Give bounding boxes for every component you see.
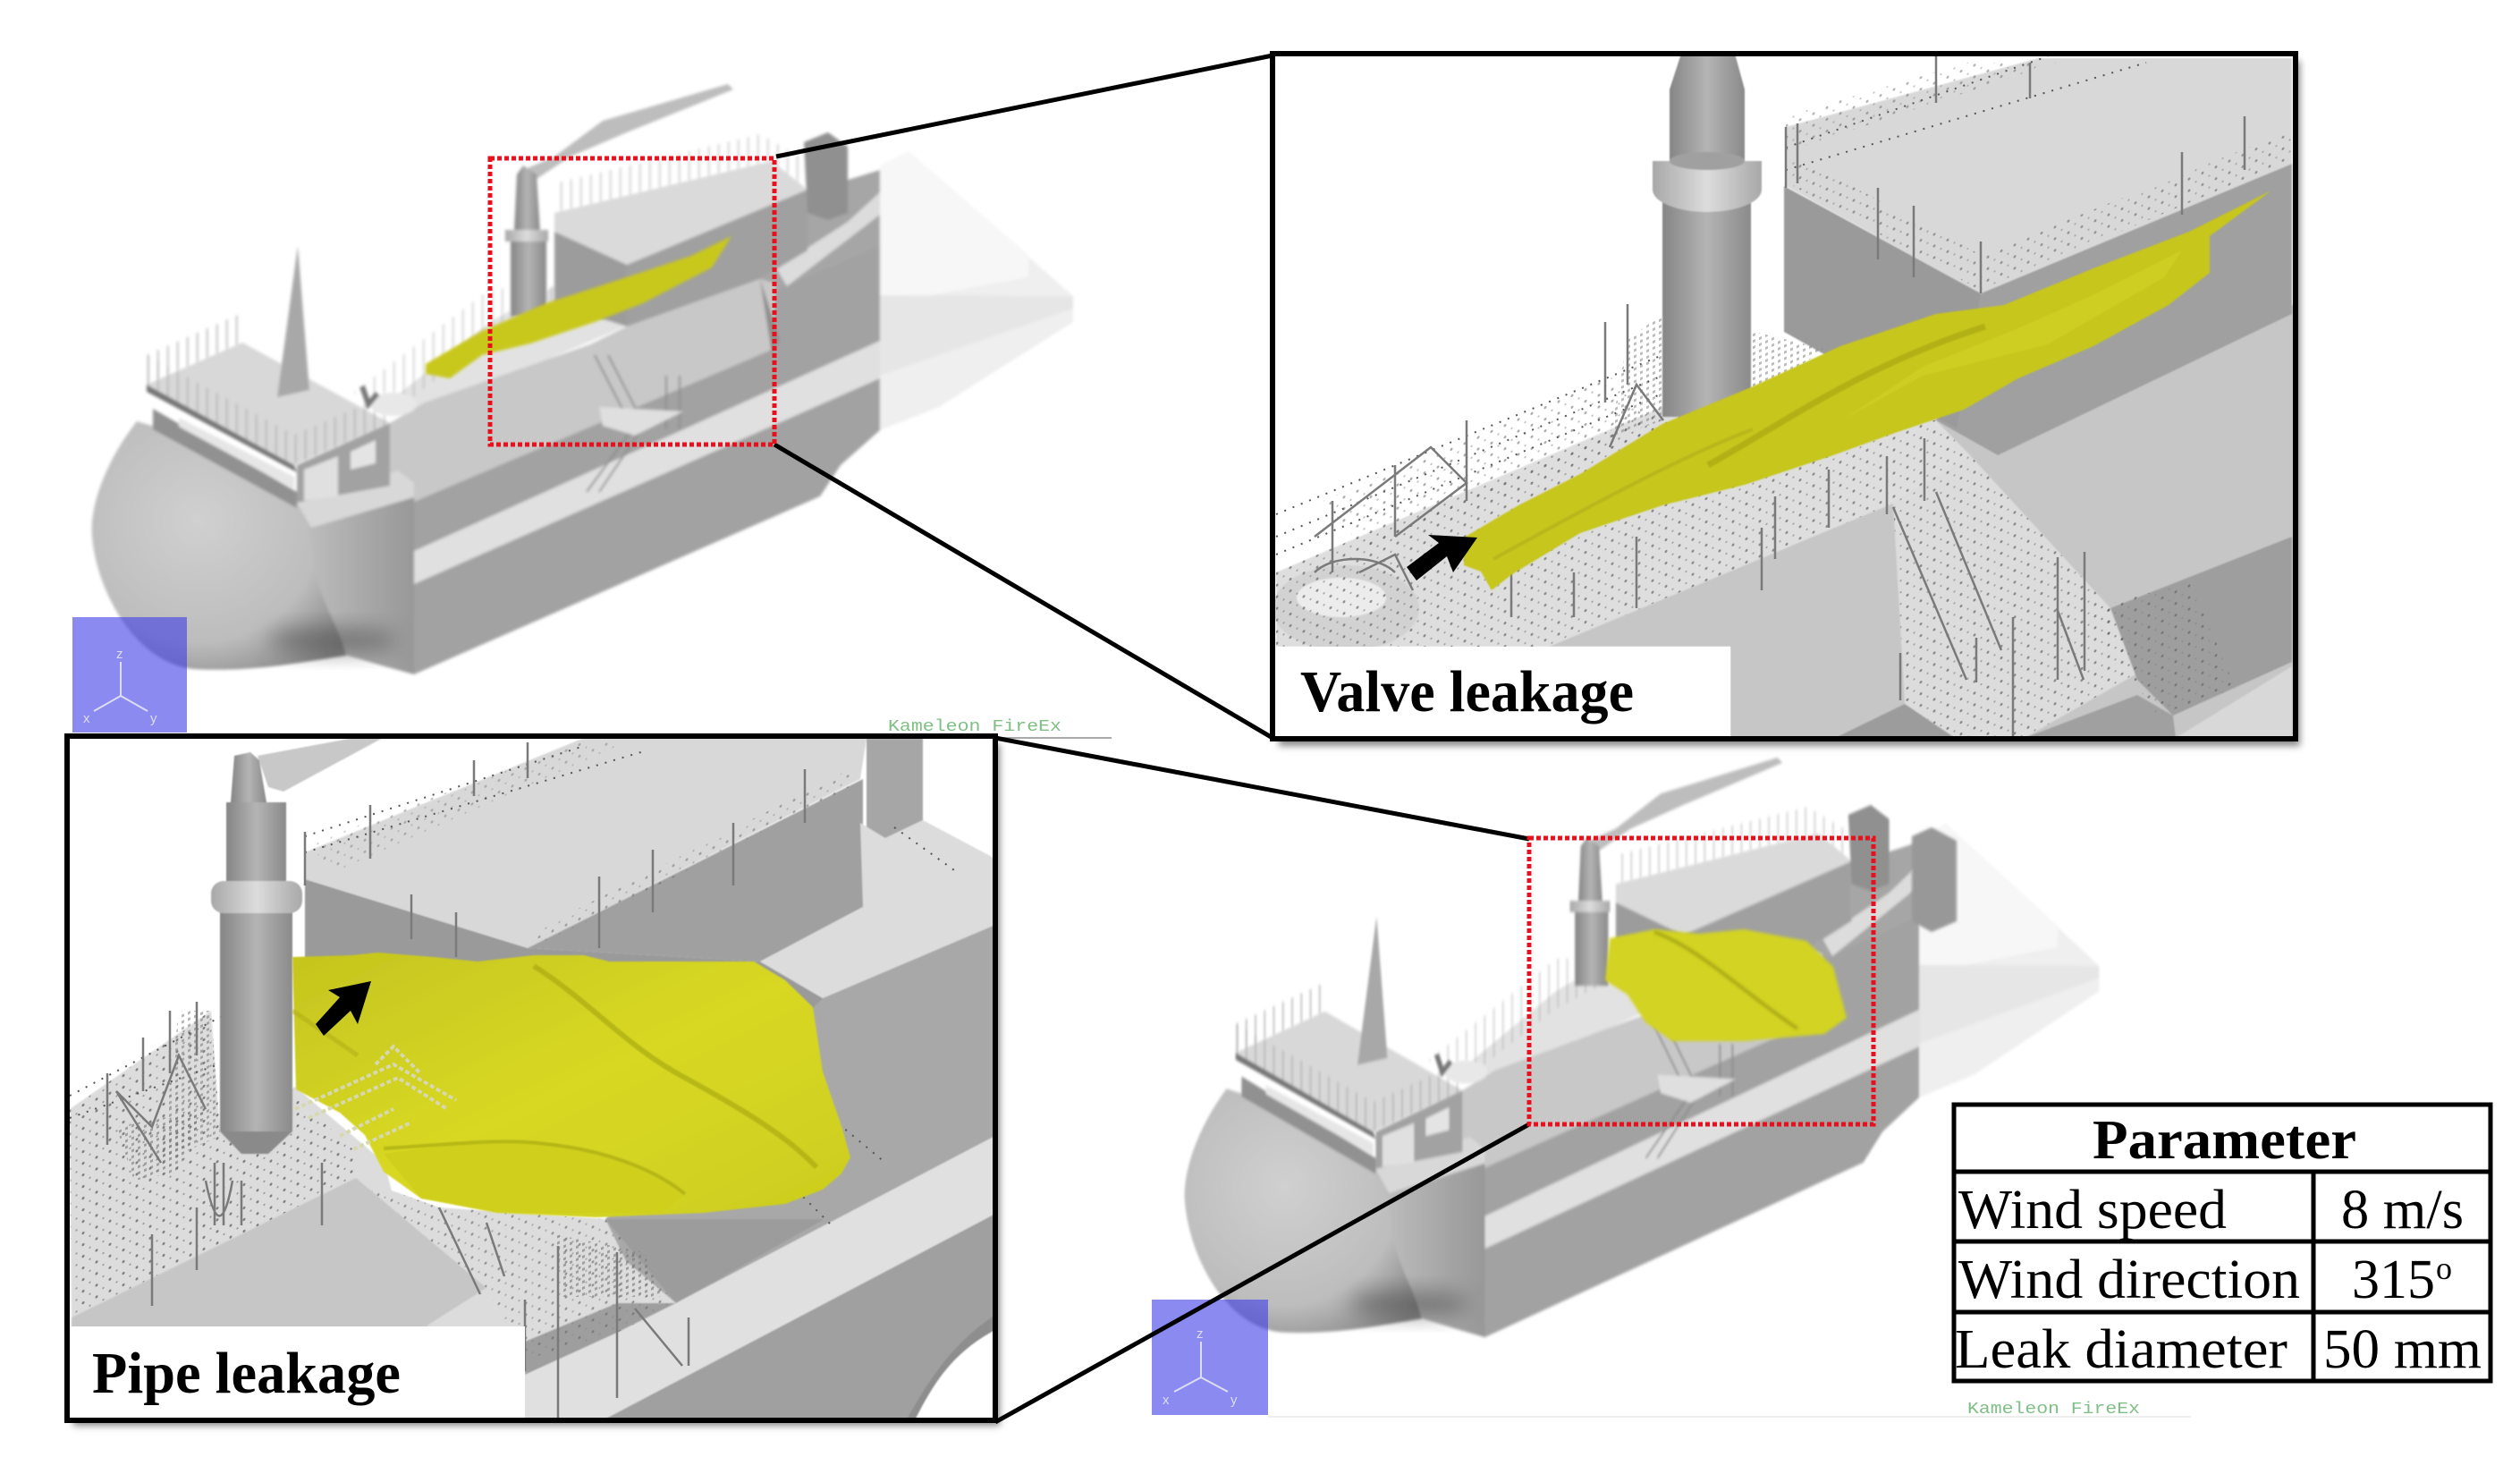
row: leak diameter [1955, 1319, 2482, 1380]
axis indicator: overview ship bottom: z [1197, 1326, 1204, 1342]
gas plume on overview ship (pipe leak) [1605, 929, 1847, 1041]
gas plume: valve leakage [1464, 191, 2271, 590]
ship model: valve leakage overview [92, 84, 1073, 674]
arrow: pipe leak point [316, 981, 371, 1036]
dotted railings: valve panel [1276, 54, 2292, 738]
axis indicator: overview ship bottom: x [1163, 1393, 1170, 1408]
connector lines: pipe zoom [995, 738, 1529, 1422]
label background and text: valve leakage [1275, 647, 1730, 739]
axis indicator: overview ship top: z [116, 647, 123, 662]
gas plume: pipe leakage [292, 953, 850, 1217]
label background and text: pipe leakage: Pipe leakage [92, 1341, 401, 1406]
panel: pipe leakage [67, 736, 1000, 1426]
axis indicator: overview ship bottom: y [1230, 1393, 1238, 1408]
row: wind speed: Wind speed [1958, 1180, 2227, 1241]
software credit: top ship: Kameleon FireEx [888, 718, 1061, 736]
dotted railings: pipe panel [70, 742, 957, 1422]
software credit: bottom ship: Kameleon FireEx [1967, 1401, 2140, 1419]
gas plume on overview ship (valve leak) [426, 236, 731, 378]
pipe rack overlapping plume [295, 1046, 456, 1149]
row: wind speed: 8 m/s [2341, 1180, 2464, 1241]
arrow: valve leak point [1407, 535, 1477, 580]
axis indicator: overview ship top: x [83, 711, 90, 726]
row: wind speed [1958, 1180, 2464, 1241]
red dashed zoom box: pipe area [1529, 838, 1873, 1124]
exhaust funnel: valve panel [1653, 54, 1762, 417]
label background and text: pipe leakage [70, 1326, 525, 1419]
axis indicator: overview ship top [72, 617, 187, 733]
exhaust funnel and duct: pipe panel [211, 737, 385, 1154]
label background and text: valve leakage: Valve leakage [1300, 659, 1634, 724]
row: wind direction [1958, 1250, 2452, 1310]
ship model: pipe leakage overview [1185, 758, 2099, 1337]
row: leak diameter: 50 mm [2323, 1319, 2482, 1380]
panel: valve leakage [1273, 54, 2300, 746]
axis indicator: overview ship bottom [1152, 1300, 1268, 1415]
table heading: Parameter [2093, 1110, 2356, 1171]
row: leak diameter: Leak diameter [1955, 1319, 2287, 1380]
row: wind direction: o [2436, 1250, 2452, 1286]
connector lines: valve zoom [774, 55, 1273, 738]
parameter table [1954, 1105, 2490, 1381]
row: wind direction: Wind direction [1958, 1250, 2300, 1310]
axis indicator: overview ship top: y [150, 711, 157, 726]
row: wind direction: 315 [2352, 1250, 2435, 1310]
second vent box on lower ship [1912, 827, 1957, 932]
red dashed zoom box: valve area [490, 158, 774, 445]
